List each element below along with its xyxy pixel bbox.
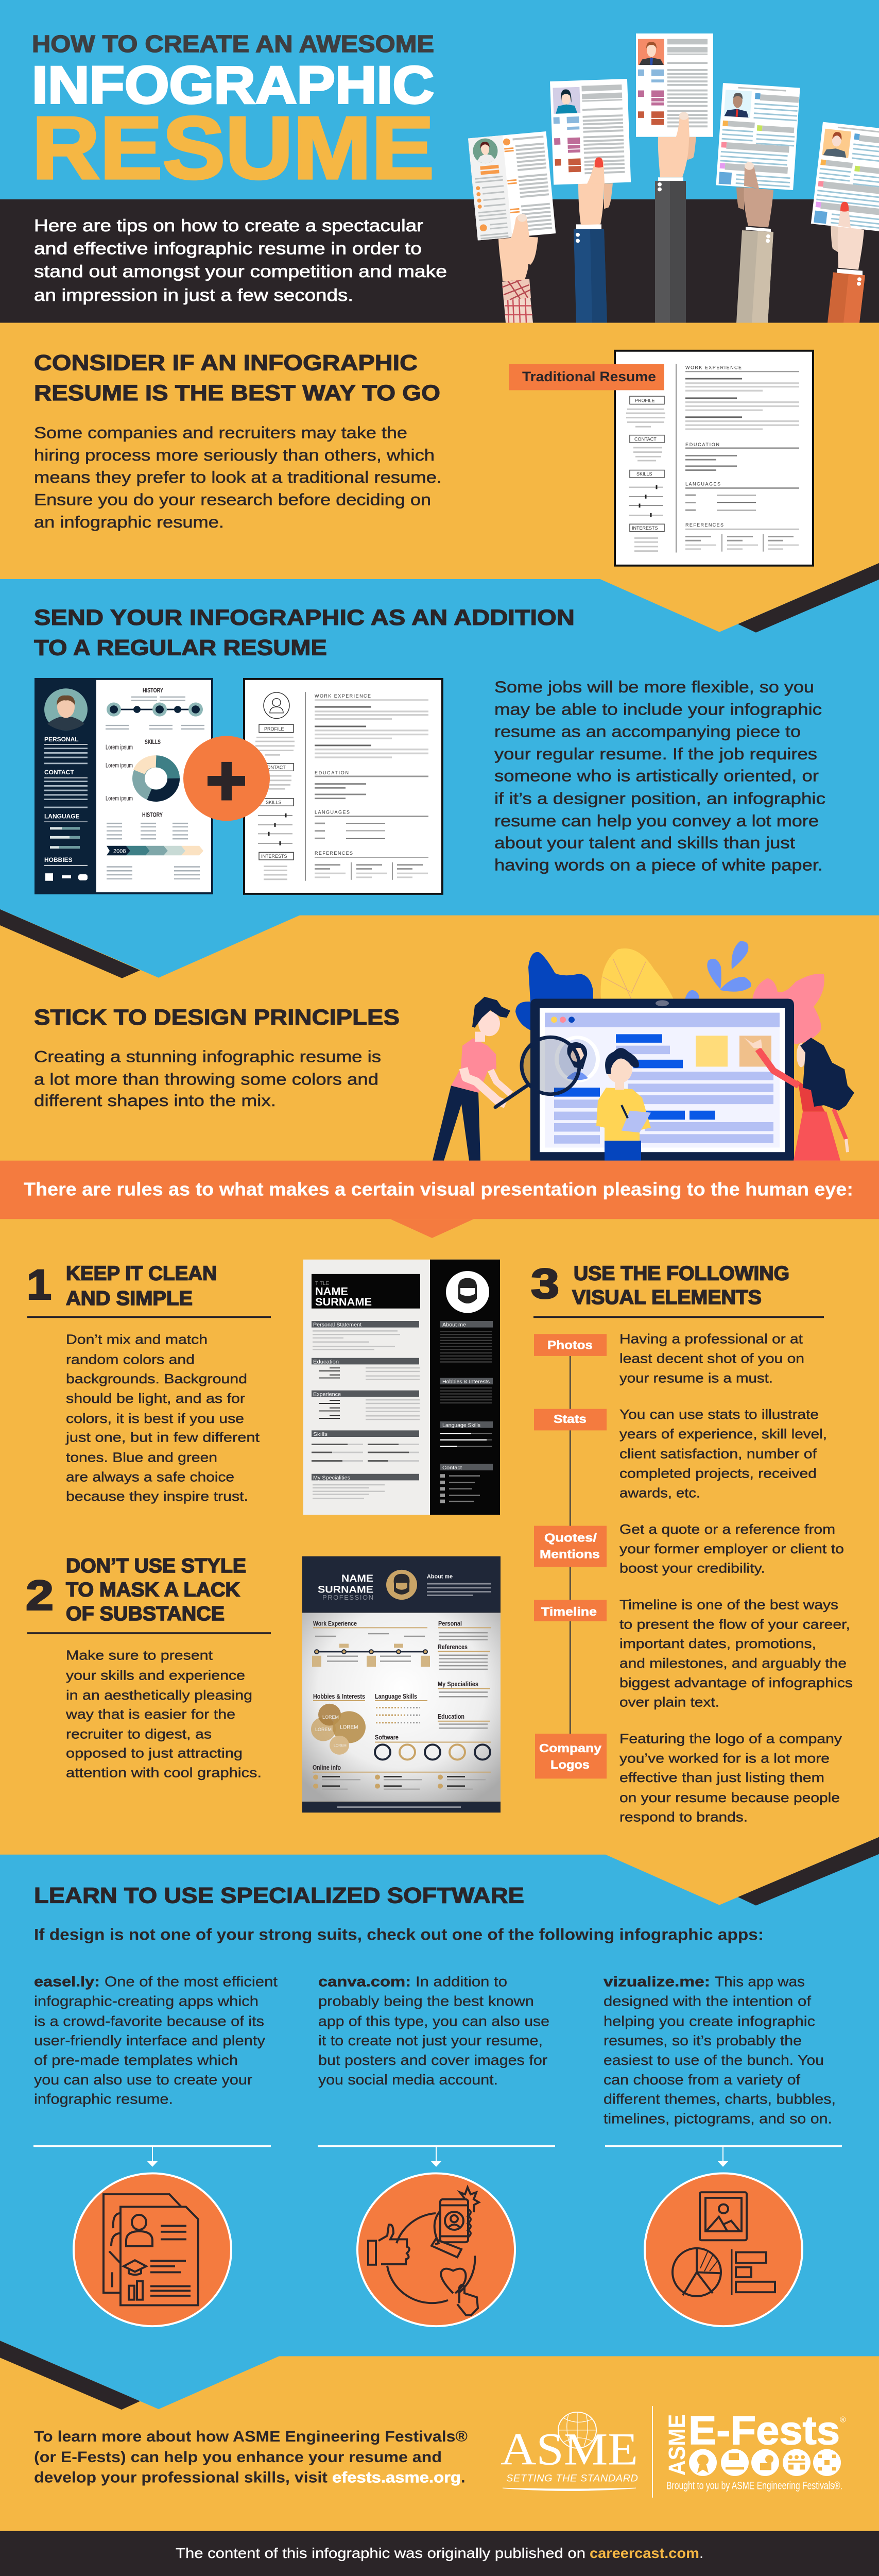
text: tip 1 body bbox=[65, 1332, 260, 1504]
icon: social media hand and phone bbox=[357, 2173, 515, 2326]
panel: blue section send as addition background bbox=[0, 579, 879, 978]
text: stats: client satisfaction, number of bbox=[619, 1446, 817, 1462]
heading: tip 3 bbox=[533, 1262, 824, 1318]
panel: specialized software bbox=[0, 1837, 879, 2410]
text: consider body: an infographic resume. bbox=[34, 513, 224, 531]
navy and gold resume sample: References bbox=[438, 1643, 468, 1651]
text: timeline: over plain text. bbox=[619, 1694, 719, 1710]
text: tip 1 body: are always a safe choice bbox=[66, 1469, 234, 1484]
infographic resume sample: PERSONAL bbox=[44, 736, 79, 743]
text: tip 1 body: because they inspire trust. bbox=[66, 1488, 248, 1504]
logo: ASME E-Fests bbox=[664, 2408, 846, 2492]
text: send body: having words on a piece of white paper. bbox=[494, 856, 823, 874]
label: traditional resume: Traditional Resume bbox=[522, 368, 656, 384]
text: stick body: different shapes into the mix. bbox=[34, 1091, 276, 1110]
black and white resume sample: Hobbies & Interests bbox=[442, 1379, 490, 1385]
traditional resume sample: CONTACT bbox=[634, 436, 657, 442]
text: quotes: Get a quote or a reference from bbox=[619, 1521, 835, 1537]
number 1: 1 bbox=[27, 1261, 51, 1308]
panel: tip 1 keep it clean bbox=[27, 1260, 500, 1515]
text: company logos: Featuring the logo of a company bbox=[619, 1731, 842, 1746]
navy and gold resume sample: Work Experience bbox=[313, 1620, 357, 1628]
text: learn more: efests.asme.org bbox=[332, 2469, 461, 2486]
traditional resume sample: INTERESTS bbox=[632, 526, 658, 531]
column: easel.ly: of pre-made templates which bbox=[34, 2052, 238, 2069]
heading: tip 2: TO MASK A LACK bbox=[66, 1579, 240, 1601]
text: send body: if it’s a designer position, an infographic bbox=[494, 789, 825, 807]
text: send body bbox=[494, 678, 825, 874]
heading: stick: STICK TO DESIGN PRINCIPLES bbox=[34, 1006, 400, 1030]
text: send body: about your talent and skills than just bbox=[494, 834, 795, 852]
regular resume sample: INTERESTS bbox=[261, 854, 287, 859]
stripe under blue chevron bbox=[0, 909, 140, 978]
traditional resume sample: WORK EXPERIENCE bbox=[685, 365, 742, 370]
column: easel.ly bbox=[34, 1974, 278, 2107]
column: canva.com: canva.com: bbox=[318, 1974, 411, 1990]
tag: timeline bbox=[534, 1600, 607, 1621]
tag: company logos: Logos bbox=[550, 1758, 590, 1772]
regular resume sample: WORK EXPERIENCE bbox=[315, 693, 371, 699]
logo: ASME E-Fests: ® bbox=[840, 2416, 846, 2424]
column: canva.com: you social media account. bbox=[318, 2072, 498, 2088]
heading: send bbox=[34, 606, 575, 660]
heading: tip 1: AND SIMPLE bbox=[66, 1287, 193, 1310]
illustration: people around tablet bbox=[433, 941, 854, 1161]
black and white resume sample: Language Skills bbox=[442, 1423, 480, 1429]
navy and gold resume sample: About me bbox=[427, 1574, 453, 1580]
heading: consider: RESUME IS THE BEST WAY TO GO bbox=[34, 381, 440, 405]
panel: tip 2 style vs substance bbox=[26, 1554, 501, 1812]
logo: ASME: SETTING THE STANDARD bbox=[506, 2473, 638, 2484]
arm 1 plaid sleeve bbox=[498, 237, 538, 323]
text: send body: someone who is artistically oriented, or bbox=[494, 767, 819, 785]
text: send body: resume as an accompanying piece to bbox=[494, 722, 801, 740]
tag: stats: Stats bbox=[554, 1413, 587, 1426]
navy and gold resume sample: Software bbox=[375, 1734, 399, 1741]
tag: photos: Photos bbox=[547, 1339, 593, 1352]
title bbox=[33, 35, 434, 180]
navy and gold resume sample: Language Skills bbox=[375, 1692, 417, 1700]
resume sheet 1 bbox=[468, 131, 556, 241]
infographic resume sample: HOBBIES bbox=[44, 856, 73, 863]
text: learn more: (or E-Fests) can help you enhance your resume and bbox=[34, 2448, 442, 2466]
black and white resume sample: Contact bbox=[442, 1465, 462, 1471]
hero intro text: an impression in just a few seconds. bbox=[34, 286, 353, 305]
arrows from columns to icons bbox=[33, 2146, 842, 2167]
heading: tip 1: KEEP IT CLEAN bbox=[66, 1262, 217, 1284]
regular resume sample bbox=[244, 679, 442, 894]
text: send body: your regular resume. If the job requires bbox=[494, 744, 817, 763]
black and white resume sample: Education bbox=[313, 1360, 339, 1365]
leaves bbox=[515, 941, 824, 1044]
navy and gold resume sample: Hobbies & Interests bbox=[313, 1692, 365, 1700]
text: learn more bbox=[34, 2428, 468, 2486]
footer: The content of this infographic was originally published on bbox=[176, 2545, 585, 2562]
navy and gold resume sample: My Specialities bbox=[438, 1680, 478, 1688]
heading: tip 1 bbox=[27, 1262, 271, 1318]
title: RESUME bbox=[32, 98, 434, 197]
navy and gold resume sample: NAME bbox=[341, 1573, 373, 1584]
tag: company logos: Company bbox=[539, 1742, 602, 1755]
panel: send as addition bbox=[34, 606, 825, 894]
text: tip 1 body: Don’t mix and match bbox=[66, 1332, 208, 1347]
column: canva.com: In addition to bbox=[416, 1974, 507, 1990]
column: easel.ly: user-friendly interface and plenty bbox=[34, 2033, 266, 2049]
text: stats: completed projects, received bbox=[619, 1466, 817, 1481]
text: quotes: boost your credibility. bbox=[619, 1561, 765, 1576]
infographic resume sample: Lorem ipsum bbox=[106, 762, 133, 769]
text: photos: your resume is a must. bbox=[619, 1370, 773, 1385]
logo: ASME E-Fests: E-Fests bbox=[688, 2408, 840, 2453]
regular resume sample: PROFILE bbox=[264, 726, 284, 732]
regular resume sample: EDUCATION bbox=[315, 770, 349, 775]
column: easel.ly: infographic resume. bbox=[34, 2091, 173, 2107]
woman with notepad bbox=[596, 1048, 651, 1161]
navy and gold resume sample: Education bbox=[438, 1713, 464, 1720]
infographic resume sample: 2008 bbox=[113, 848, 126, 854]
column: vizualize.me: This app was bbox=[715, 1974, 805, 1990]
text: photos bbox=[619, 1331, 804, 1385]
man with magnifier bbox=[433, 997, 579, 1161]
black and white resume sample: Personal Statement bbox=[313, 1323, 361, 1328]
text: tip 1 body: just one, but in few different bbox=[65, 1430, 260, 1445]
text: company logos: respond to brands. bbox=[619, 1809, 748, 1825]
panel: stick to design principles bbox=[34, 941, 854, 1161]
navy and gold resume sample: LOREM bbox=[322, 1715, 339, 1720]
label: traditional resume bbox=[509, 364, 664, 390]
text: tip 2 body: your skills and experience bbox=[66, 1668, 245, 1683]
column: easel.ly: infographic-creating apps which bbox=[34, 1993, 258, 2009]
traditional resume sample bbox=[615, 351, 813, 566]
heading: send: TO A REGULAR RESUME bbox=[34, 636, 327, 660]
regular resume sample: LANGUAGES bbox=[315, 810, 350, 815]
resume sheet 3 bbox=[636, 33, 713, 137]
infographic resume sample: SKILLS bbox=[145, 738, 161, 745]
navy and gold resume sample: PROFESSION bbox=[322, 1594, 373, 1601]
title: HOW TO CREATE AN AWESOME bbox=[32, 31, 434, 58]
heading: software: LEARN TO USE SPECIALIZED SOFTWARE bbox=[34, 1884, 524, 1908]
hero intro text bbox=[34, 216, 447, 305]
text: photos: least decent shot of you on bbox=[619, 1351, 804, 1366]
subheading: software: If design is not one of your strong suits, check out one of the following infographic apps: bbox=[34, 1925, 764, 1943]
navy and gold resume sample: LOREM bbox=[315, 1727, 332, 1732]
text: consider body: Ensure you do your research before deciding on bbox=[34, 490, 431, 509]
panel: tip 3 visual elements bbox=[531, 1260, 853, 1825]
regular resume sample: CONTACT bbox=[264, 765, 286, 770]
column: canva.com: app of this type, you can also use bbox=[318, 2013, 549, 2029]
text: tip 2 body: recruiter to digest, as bbox=[66, 1726, 212, 1742]
column: vizualize.me: designed with the intention of bbox=[604, 1993, 811, 2009]
text: learn more: develop your professional skills, visit bbox=[34, 2469, 328, 2486]
hero intro text: stand out amongst your competition and make bbox=[34, 263, 447, 281]
heading: tip 3: USE THE FOLLOWING bbox=[574, 1262, 789, 1284]
title: INFOGRAPHIC bbox=[32, 55, 434, 114]
panel: call to action bbox=[34, 2406, 846, 2498]
column: vizualize.me: different themes, charts, bubbles, bbox=[604, 2091, 836, 2107]
icon: image and charts bbox=[645, 2173, 802, 2326]
infographic resume sample bbox=[36, 679, 212, 893]
black and white resume sample: SURNAME bbox=[315, 1295, 372, 1308]
resume sheet 5 bbox=[811, 122, 879, 232]
column: easel.ly: you can also use to create your bbox=[34, 2072, 253, 2088]
tablet bbox=[530, 999, 794, 1161]
text: stats bbox=[619, 1406, 827, 1500]
infographic resume sample: CONTACT bbox=[44, 769, 74, 776]
heading: tip 2: DON’T USE STYLE bbox=[66, 1554, 246, 1577]
column: easel.ly: is a crowd-favorite because of its bbox=[34, 2013, 264, 2029]
resume sheet 2 bbox=[550, 79, 631, 185]
text: quotes bbox=[619, 1521, 844, 1576]
text: company logos bbox=[619, 1731, 842, 1825]
navy and gold resume sample: SURNAME bbox=[318, 1584, 373, 1595]
infographic resume sample: HISTORY bbox=[142, 811, 163, 818]
divider bbox=[652, 2406, 653, 2498]
tag: photos bbox=[534, 1334, 607, 1356]
arm 5 orange sleeve bbox=[828, 225, 865, 323]
black and white resume sample bbox=[303, 1260, 500, 1515]
text: learn more: To learn more about how ASME Engineering Festivals® bbox=[34, 2428, 468, 2445]
infographic resume sample: Lorem ipsum bbox=[106, 795, 133, 802]
number 2: 2 bbox=[26, 1572, 54, 1619]
column: vizualize.me: vizualize.me: bbox=[604, 1974, 710, 1990]
e-fests icon row bbox=[689, 2449, 841, 2476]
number 3: 3 bbox=[531, 1260, 559, 1307]
panel: consider bbox=[34, 351, 813, 566]
arm 4 tan sleeve bbox=[736, 188, 773, 323]
icon: resume documents bbox=[74, 2173, 231, 2326]
column: canva.com bbox=[318, 1974, 549, 2088]
timeline connector bbox=[570, 1356, 571, 1734]
column: canva.com: it to create not just your resume, bbox=[318, 2033, 543, 2049]
heading: tip 3: VISUAL ELEMENTS bbox=[572, 1286, 762, 1309]
text: timeline: to present the flow of your career, bbox=[619, 1617, 850, 1632]
text: tip 1 body: tones. Blue and green bbox=[66, 1450, 217, 1465]
infographic resume sample: Lorem ipsum bbox=[106, 743, 133, 751]
tag: company logos bbox=[535, 1734, 607, 1778]
text: tip 1 body: should be light, and as for bbox=[66, 1391, 245, 1406]
black and white resume sample: NAME bbox=[315, 1285, 348, 1297]
text: tip 1 body: backgrounds. Background bbox=[66, 1371, 247, 1386]
tag: quotes: Mentions bbox=[540, 1548, 600, 1562]
tag: timeline: Timeline bbox=[541, 1605, 597, 1619]
text: tip 2 body: opposed to just attracting bbox=[66, 1745, 243, 1760]
text: consider body: means they prefer to look at a traditional resume. bbox=[34, 468, 442, 486]
resume sheet 4 bbox=[716, 83, 800, 190]
text: stick body bbox=[34, 1047, 381, 1110]
traditional resume sample: REFERENCES bbox=[685, 522, 723, 528]
text: company logos: you’ve worked for is a lot more bbox=[619, 1751, 830, 1766]
text: stick body: a lot more than throwing some colors and bbox=[34, 1070, 378, 1088]
banner: rules bbox=[0, 1161, 879, 1238]
text: tip 1 body: random colors and bbox=[66, 1352, 195, 1367]
traditional resume sample: LANGUAGES bbox=[685, 482, 720, 487]
black and white resume sample: My Specialities bbox=[313, 1476, 350, 1481]
woman in red dress bbox=[744, 1038, 854, 1161]
regular resume sample: SKILLS bbox=[266, 800, 282, 805]
text: tip 1 body: colors, it is best if you use bbox=[66, 1411, 244, 1426]
navy and gold resume sample: Online info bbox=[313, 1764, 341, 1771]
text: consider body: Some companies and recruiters may take the bbox=[34, 423, 407, 442]
text: timeline bbox=[619, 1597, 853, 1710]
column: easel.ly: easel.ly: bbox=[34, 1974, 100, 1990]
text: timeline: and milestones, and arguably the bbox=[619, 1655, 847, 1671]
traditional resume sample: SKILLS bbox=[636, 471, 652, 477]
banner: rules: There are rules as to what makes a certain visual presentation pleasing to the human eye: bbox=[24, 1179, 853, 1199]
text: send body: may be able to include your infographic bbox=[494, 700, 822, 719]
text: photos: Having a professional or at bbox=[619, 1331, 803, 1347]
navy and gold resume sample: Personal bbox=[438, 1620, 462, 1628]
text: tip 2 body: attention with cool graphics. bbox=[66, 1765, 262, 1780]
tag: stats bbox=[534, 1409, 607, 1430]
text: consider body: hiring process more seriously than others, which bbox=[34, 446, 435, 464]
thumbs over the sheets bbox=[510, 112, 851, 241]
navy and gold resume sample: LOREM bbox=[340, 1724, 358, 1730]
navy and gold resume sample bbox=[302, 1556, 501, 1812]
footer: . bbox=[699, 2545, 703, 2562]
black and white resume sample: Skills bbox=[313, 1432, 328, 1437]
column: vizualize.me: resumes, so it’s probably the bbox=[604, 2033, 802, 2049]
infographic resume sample: HISTORY bbox=[143, 687, 163, 694]
panel: hero bbox=[0, 0, 879, 323]
text: tip 2 body: way that is easier for the bbox=[65, 1706, 235, 1722]
text: stats: You can use stats to illustrate bbox=[619, 1406, 819, 1422]
text: tip 2 body: Make sure to present bbox=[66, 1648, 213, 1663]
column: vizualize.me bbox=[604, 1974, 836, 2127]
panel: yellow section consider background bbox=[0, 323, 879, 632]
traditional resume sample: PROFILE bbox=[635, 398, 655, 403]
black and white resume sample: Experience bbox=[313, 1392, 341, 1397]
infographic resume sample: LANGUAGE bbox=[44, 813, 80, 820]
text: tip 2 body bbox=[65, 1648, 262, 1780]
heading: send: SEND YOUR INFOGRAPHIC AS AN ADDITION bbox=[34, 606, 575, 630]
heading: consider: CONSIDER IF AN INFOGRAPHIC bbox=[34, 351, 418, 375]
regular resume sample: REFERENCES bbox=[315, 851, 353, 856]
heading: tip 2: OF SUBSTANCE bbox=[66, 1602, 225, 1625]
navy and gold resume sample: LOREM bbox=[334, 1744, 347, 1748]
column: canva.com: probably being the best known bbox=[318, 1993, 534, 2009]
text: timeline: Timeline is one of the best ways bbox=[619, 1597, 838, 1612]
column: vizualize.me: can choose from a variety of bbox=[604, 2072, 800, 2088]
logo: ASME bbox=[501, 2412, 638, 2490]
text: consider body bbox=[34, 423, 442, 531]
black and white resume sample: About me bbox=[442, 1323, 467, 1328]
logo: ASME E-Fests: ASME bbox=[664, 2414, 690, 2476]
text: learn more: . bbox=[461, 2469, 466, 2486]
tag: quotes bbox=[534, 1526, 607, 1567]
black and white resume sample: TITLE bbox=[315, 1281, 330, 1286]
text: stats: awards, etc. bbox=[619, 1485, 700, 1500]
text: company logos: on your resume because people bbox=[619, 1790, 840, 1805]
hero intro text: and effective infographic resume in order to bbox=[34, 240, 422, 258]
column: vizualize.me: timelines, pictograms, and so on. bbox=[604, 2111, 832, 2127]
column: canva.com: but posters and cover images for bbox=[318, 2052, 548, 2069]
text: send body: resume can help you convey a lot more bbox=[494, 811, 819, 830]
text: send body: Some jobs will be more flexible, so you bbox=[494, 678, 814, 696]
column: vizualize.me: helping you create infographic bbox=[604, 2013, 815, 2029]
text: timeline: important dates, promotions, bbox=[619, 1636, 816, 1651]
stripe under yellow chevron bbox=[738, 563, 879, 633]
tag: quotes: Quotes/ bbox=[544, 1532, 597, 1545]
text: timeline: biggest advantage of infographics bbox=[619, 1675, 853, 1690]
arm 2 navy sleeve bbox=[574, 183, 613, 323]
arm 3 grey sleeve bbox=[655, 137, 696, 323]
heading: tip 2 bbox=[27, 1554, 271, 1634]
footer: careercast.com bbox=[590, 2545, 699, 2562]
text: stick body: Creating a stunning infographic resume is bbox=[34, 1047, 381, 1066]
text: quotes: your former employer or client to bbox=[619, 1541, 844, 1556]
text: company logos: effective than just listing them bbox=[619, 1770, 824, 1785]
traditional resume sample: EDUCATION bbox=[685, 442, 719, 447]
illustration: hands holding resumes bbox=[468, 33, 879, 323]
icon: plus circle bbox=[183, 736, 270, 821]
column: easel.ly: One of the most efficient bbox=[105, 1974, 278, 1990]
hero intro text: Here are tips on how to create a spectacular bbox=[34, 216, 423, 235]
column: vizualize.me: easiest to use of the bunch. You bbox=[604, 2052, 824, 2069]
heading: consider bbox=[34, 351, 440, 405]
footer bbox=[0, 2531, 879, 2576]
logo: ASME: ASME bbox=[501, 2424, 638, 2475]
text: stats: years of experience, skill level, bbox=[619, 1426, 827, 1442]
text: tip 2 body: in an aesthetically pleasing bbox=[66, 1687, 252, 1703]
